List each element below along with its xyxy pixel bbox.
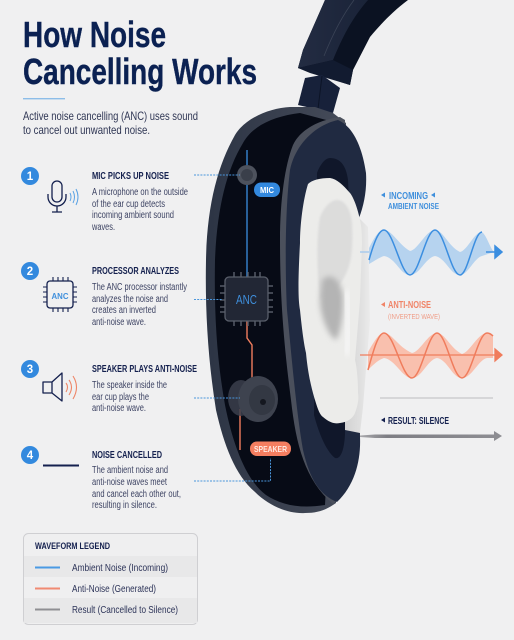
incoming label: AMBIENT NOISE	[388, 202, 440, 211]
ear concha shading	[320, 276, 343, 340]
step 3	[21, 360, 197, 414]
step 3 heading: SPEAKER PLAYS ANTI-NOISE	[92, 363, 197, 375]
title rule	[23, 98, 65, 99]
step 1 badge: 1	[27, 171, 34, 183]
panel: waveform legend	[24, 534, 198, 624]
step 2 badge	[21, 262, 39, 280]
anti-noise label	[381, 300, 440, 321]
incoming label: INCOMING	[389, 191, 428, 202]
legend title: WAVEFORM LEGEND	[35, 541, 110, 552]
legend row: ambient: Ambient Noise (Incoming)	[72, 563, 168, 574]
incoming waveform	[369, 230, 494, 275]
ear	[298, 178, 362, 423]
step 1 text: incoming ambient sound	[92, 210, 174, 221]
step 4 badge: 4	[27, 450, 34, 462]
step 3 text: anti-noise wave.	[92, 403, 146, 414]
dotted leader lines	[194, 175, 270, 481]
step 1 text: A microphone on the outside	[92, 187, 188, 198]
legend row: result: Result (Cancelled to Silence)	[72, 605, 178, 616]
incoming wave	[360, 191, 502, 275]
intro text: to cancel out unwanted noise.	[23, 123, 150, 137]
anti-noise label: (INVERTED WAVE)	[388, 312, 440, 321]
speaker driver	[228, 376, 278, 422]
icon: ANC chip: ANC	[52, 291, 68, 301]
step 1 text: of the ear cup detects	[92, 199, 165, 210]
result label	[381, 416, 449, 427]
title: Cancelling Works	[23, 51, 257, 92]
ear helix inner shading	[317, 200, 352, 300]
icon: flat line	[43, 464, 79, 466]
step 4 text	[92, 465, 181, 511]
step 3 text: ear cup plays the	[92, 392, 149, 403]
arrow: result silence	[360, 431, 502, 441]
step 3 text	[92, 380, 167, 414]
microphone capsule	[237, 165, 257, 185]
step 1 text: waves.	[91, 222, 115, 233]
result label: RESULT: SILENCE	[388, 416, 449, 427]
SPEAKER label: SPEAKER	[254, 444, 287, 454]
step 2 heading: PROCESSOR ANALYZES	[92, 265, 179, 277]
SPEAKER label	[250, 442, 291, 456]
anti-noise wave	[360, 300, 502, 378]
legend row: ambient	[35, 563, 168, 574]
icon: microphone	[48, 181, 78, 212]
anti-noise waveform	[368, 333, 493, 378]
step 3 badge: 3	[27, 364, 33, 376]
incoming label	[381, 191, 440, 211]
step 1	[21, 167, 188, 233]
cushion opening	[314, 158, 350, 458]
icon: ANC chip	[43, 277, 77, 312]
step 2 text: The ANC processor instantly	[92, 282, 187, 293]
step 3 text: The speaker inside the	[92, 380, 167, 391]
head behind ear	[345, 218, 370, 433]
black inner panel	[215, 113, 345, 507]
inner rim	[280, 117, 345, 504]
step 3 badge	[21, 360, 39, 378]
step 4 badge	[21, 446, 39, 464]
step 1 heading: MIC PICKS UP NOISE	[92, 170, 169, 182]
MIC label: MIC	[260, 185, 274, 195]
arrow: anti-noise	[360, 349, 502, 361]
arrow: incoming	[486, 246, 502, 258]
intro text: Active noise cancelling (ANC) uses sound	[23, 109, 198, 123]
step 2	[21, 262, 187, 328]
title	[23, 14, 257, 92]
step 4 text: resulting in silence.	[92, 500, 157, 511]
step 4 heading: NOISE CANCELLED	[92, 449, 162, 461]
step 2 text: creates an inverted	[92, 305, 156, 316]
step 1 badge	[21, 167, 39, 185]
step 1 text	[91, 187, 188, 233]
antihelix highlight	[346, 290, 348, 355]
ANC processor chip	[220, 272, 273, 326]
legend row: anti-noise	[35, 584, 156, 595]
icon: speaker	[43, 373, 76, 401]
headphone illustration	[206, 0, 408, 513]
ear cup shell	[206, 107, 346, 513]
anti-noise label: ANTI-NOISE	[388, 300, 431, 311]
ear cushion	[286, 120, 366, 502]
MIC label	[254, 182, 280, 197]
legend row: anti-noise: Anti-Noise (Generated)	[72, 584, 156, 595]
title: How Noise	[23, 14, 166, 55]
divider	[380, 398, 493, 399]
step 4 text: The ambient noise and	[92, 465, 168, 476]
blue signal line	[246, 150, 248, 277]
step 2 badge: 2	[27, 266, 33, 278]
step 2 text: anti-noise wave.	[92, 317, 146, 328]
headband	[298, 0, 408, 113]
intro text	[23, 109, 198, 137]
orange signal line	[240, 321, 252, 450]
step 2 text	[92, 282, 187, 328]
step 4 text: anti-noise waves meet	[92, 477, 167, 488]
step 4 text: and cancel each other out,	[92, 489, 181, 500]
step 4	[21, 446, 181, 511]
step 2 text: analyzes the noise and	[92, 294, 168, 305]
ANC processor chip: ANC	[236, 293, 257, 307]
